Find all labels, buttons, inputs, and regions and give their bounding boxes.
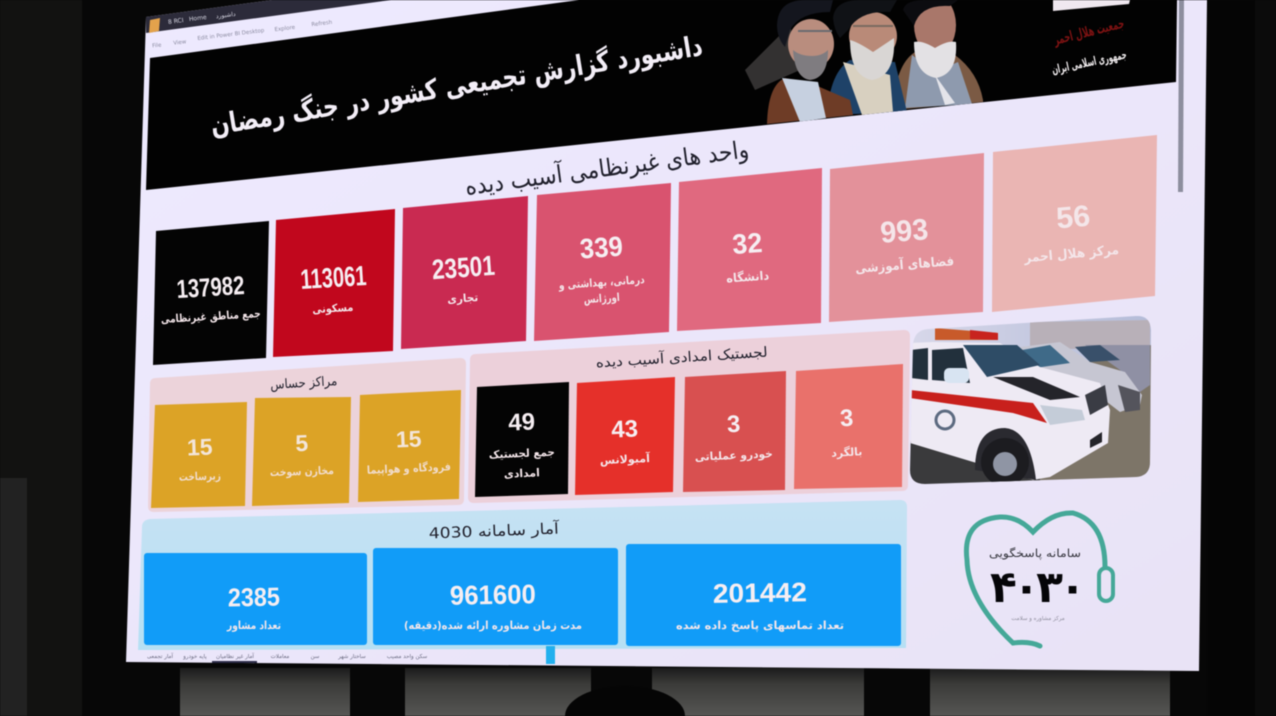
card: educational spaces: [829, 153, 984, 322]
ribbon menu: Edit in Power BI Desktop: [197, 28, 265, 42]
window title bar: Home: [189, 14, 207, 23]
card: educational spaces: فضاهای آموزشی: [855, 252, 955, 277]
logo: 4030 hotline heart: [966, 513, 1113, 646]
bottom page tabs: پایه خودرو: [182, 654, 207, 660]
bottom page tabs: سکن واحد مصیب: [387, 653, 428, 660]
banner: [146, 0, 1177, 190]
portrait: left: [767, 0, 853, 124]
card: commercial: [401, 196, 528, 349]
card: residential: [273, 209, 395, 357]
scrollbar: [1178, 0, 1184, 192]
card: red crescent centres: 56: [1055, 200, 1092, 235]
window title bar: داشبورد: [216, 11, 236, 20]
heading: لجستیک امدادی آسیب دیده: [595, 344, 768, 371]
main truck body: [910, 342, 1110, 480]
window title bar: [146, 0, 391, 33]
card: total: [153, 221, 269, 365]
vehicles behind: [1085, 345, 1150, 392]
image: ambulance fleet: [905, 312, 1155, 490]
card: commercial: تجاری: [447, 291, 479, 306]
app icon: [149, 18, 160, 33]
panel: 4030 statistics: [138, 500, 907, 650]
screen: [126, 0, 1207, 671]
card: helicopters: [794, 364, 903, 489]
card: total logistics: امدادی: [504, 466, 540, 481]
card: consulting time: 961600: [450, 579, 536, 611]
card: operational vehicles: [683, 371, 786, 492]
card: fuel: [252, 397, 351, 506]
bottom page tabs: سن: [311, 654, 320, 660]
bottom page tabs: آمار تجمعی: [147, 653, 173, 660]
bottom page tabs: آمار غیر نظامیان: [216, 653, 254, 660]
card: medical: درمانی، بهداشتی و: [558, 273, 645, 292]
card: fuel: مخازن سوخت: [270, 464, 334, 479]
ribbon menu: View: [173, 39, 187, 47]
card: infrastructure: 15: [186, 434, 213, 460]
panel: rescue logistics: [468, 330, 910, 503]
portraits: [745, 0, 983, 124]
card: red crescent centres: [992, 135, 1157, 312]
card: consultants: [144, 553, 367, 645]
heading: مراکز حساس: [270, 374, 338, 393]
emblem: جمهوری اسلامی ایران: [1051, 47, 1128, 78]
portrait: centre: [827, 0, 907, 115]
card: residential: مسکونی: [312, 301, 354, 316]
card: total logistics: 49: [508, 408, 536, 437]
emblem: جمعیت هلال احمر: [1052, 16, 1126, 49]
panel: sensitive centres: [148, 358, 466, 512]
window title bar: 8 RCI: [168, 17, 184, 26]
card: fuel: 5: [295, 430, 309, 456]
card: residential: 113061: [300, 260, 367, 295]
card: operational vehicles: خودرو عملیاتی: [695, 447, 773, 464]
card: operational vehicles: 3: [726, 411, 741, 438]
card: calls answered: تعداد تماسهای پاسخ داده شده: [676, 619, 844, 632]
ribbon menu: Explore: [274, 25, 296, 33]
card: helicopters: 3: [839, 405, 854, 432]
card: infrastructure: [151, 402, 247, 508]
logo: 4030 hotline heart: مرکز مشاوره و سلامت: [1011, 615, 1065, 622]
card: total: 137982: [176, 270, 245, 304]
logo: 4030 hotline heart: ۴۰۳۰: [990, 562, 1086, 613]
card: commercial: 23501: [431, 250, 496, 285]
title: داشبورد گزارش تجمیعی کشور در جنگ رمضان: [208, 29, 705, 142]
logo: 4030 hotline heart: سامانه پاسخگویی: [989, 547, 1081, 560]
card: ambulances: 43: [611, 415, 639, 444]
bottom page tabs: معاملات: [271, 654, 289, 660]
card: calls answered: [626, 544, 901, 646]
card: consultants: 2385: [228, 582, 280, 612]
card: helicopters: بالگرد: [831, 445, 863, 460]
bottom page tabs: ساختار شهر: [337, 654, 366, 660]
card: educational spaces: 993: [879, 213, 929, 250]
card: consulting time: [373, 548, 618, 645]
card: universities: 32: [731, 227, 763, 260]
ribbon menu: Refresh: [311, 20, 333, 28]
card: universities: دانشگاه: [726, 269, 770, 285]
card: ambulances: آمبولانس: [600, 451, 650, 467]
scroll marker: [546, 646, 555, 664]
card: total: جمع مناطق غیرنظامی: [160, 307, 261, 326]
card: total logistics: [475, 382, 569, 497]
card: red crescent centres: مرکز هلال احمر: [1023, 243, 1120, 266]
card: medical: [534, 183, 671, 341]
heading: آمار سامانه 4030: [429, 519, 560, 542]
card: infrastructure: زیرساخت: [179, 469, 221, 484]
card: airports: 15: [395, 425, 422, 453]
card: total logistics: جمع لجستیک: [489, 446, 555, 461]
card: ambulances: [575, 377, 675, 495]
card: calls answered: 201442: [713, 577, 807, 609]
card: consultants: تعداد مشاور: [226, 619, 281, 632]
card: medical: 339: [579, 231, 624, 264]
heading: non-military units: واحد های غیرنظامی آسیب دیده: [463, 134, 751, 201]
portrait: right: [893, 0, 983, 110]
emblem: [1051, 0, 1130, 78]
ribbon menu: [152, 20, 333, 50]
card: consulting time: مدت زمان مشاوره ارائه شده(دقیقه): [404, 619, 582, 632]
card: airports: [358, 390, 461, 502]
ribbon menu: File: [152, 42, 162, 50]
card: universities: [677, 168, 822, 331]
card: medical: اورژانس: [583, 291, 620, 306]
bottom page tabs: [147, 653, 428, 663]
card: airports: فرودگاه و هواپیما: [367, 460, 451, 477]
